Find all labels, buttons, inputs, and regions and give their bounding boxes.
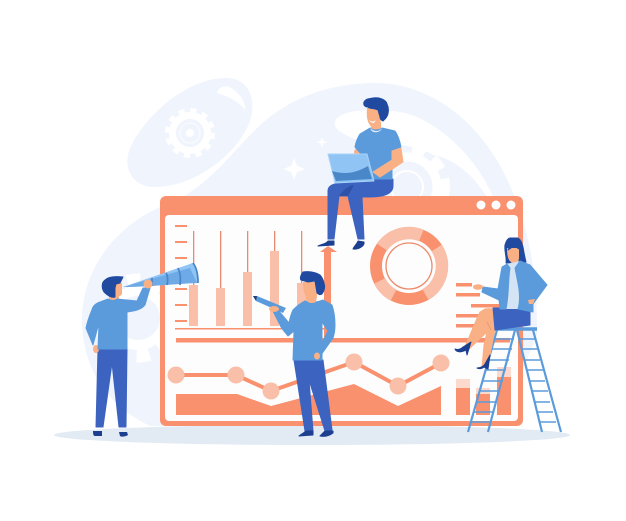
hair — [300, 272, 325, 295]
waist hand — [314, 352, 320, 360]
forearm — [373, 148, 403, 177]
person: man with pen — [253, 272, 335, 436]
far hand — [354, 148, 364, 156]
laptop — [328, 154, 374, 183]
skirt — [493, 308, 530, 330]
legs — [465, 309, 495, 367]
divider band — [176, 338, 510, 342]
pen — [253, 296, 286, 313]
line chart — [168, 354, 450, 400]
area chart — [176, 384, 441, 415]
dashboard window — [160, 196, 523, 426]
lower hand — [93, 345, 99, 353]
face — [507, 248, 519, 265]
shirt — [505, 261, 520, 309]
sweater — [273, 300, 335, 360]
trousers — [328, 179, 393, 239]
face — [367, 108, 381, 127]
collar and neck — [371, 122, 381, 130]
heels — [455, 342, 471, 355]
face — [114, 283, 122, 297]
candlestick bar chart — [175, 225, 327, 330]
neck — [109, 293, 119, 301]
ground shadow — [54, 425, 570, 445]
person: man sitting with laptop — [318, 98, 403, 249]
trousers — [294, 360, 332, 431]
hair — [102, 277, 123, 297]
donut chart — [376, 233, 442, 299]
shoes — [299, 431, 313, 436]
hair — [364, 98, 388, 121]
trousers — [96, 349, 127, 427]
hands — [473, 284, 483, 290]
person: woman sitting on ladder — [455, 238, 547, 369]
telescope — [123, 263, 198, 287]
shirt — [355, 128, 401, 179]
sweater — [86, 288, 150, 349]
stepladder — [468, 329, 561, 432]
small bar chart — [456, 367, 511, 415]
window control dots — [476, 200, 516, 210]
neck and face — [303, 282, 317, 303]
text lines — [456, 283, 503, 328]
background blob: small egg with gear — [127, 78, 252, 187]
shoes — [318, 241, 334, 246]
pen hand — [269, 306, 279, 312]
hair — [505, 238, 526, 263]
upper hand — [144, 280, 152, 288]
shoes — [93, 431, 102, 436]
person: man with telescope — [86, 263, 198, 437]
upward arrow — [320, 246, 337, 340]
jacket — [482, 261, 547, 312]
background blob: large shape behind dashboard — [82, 83, 537, 426]
